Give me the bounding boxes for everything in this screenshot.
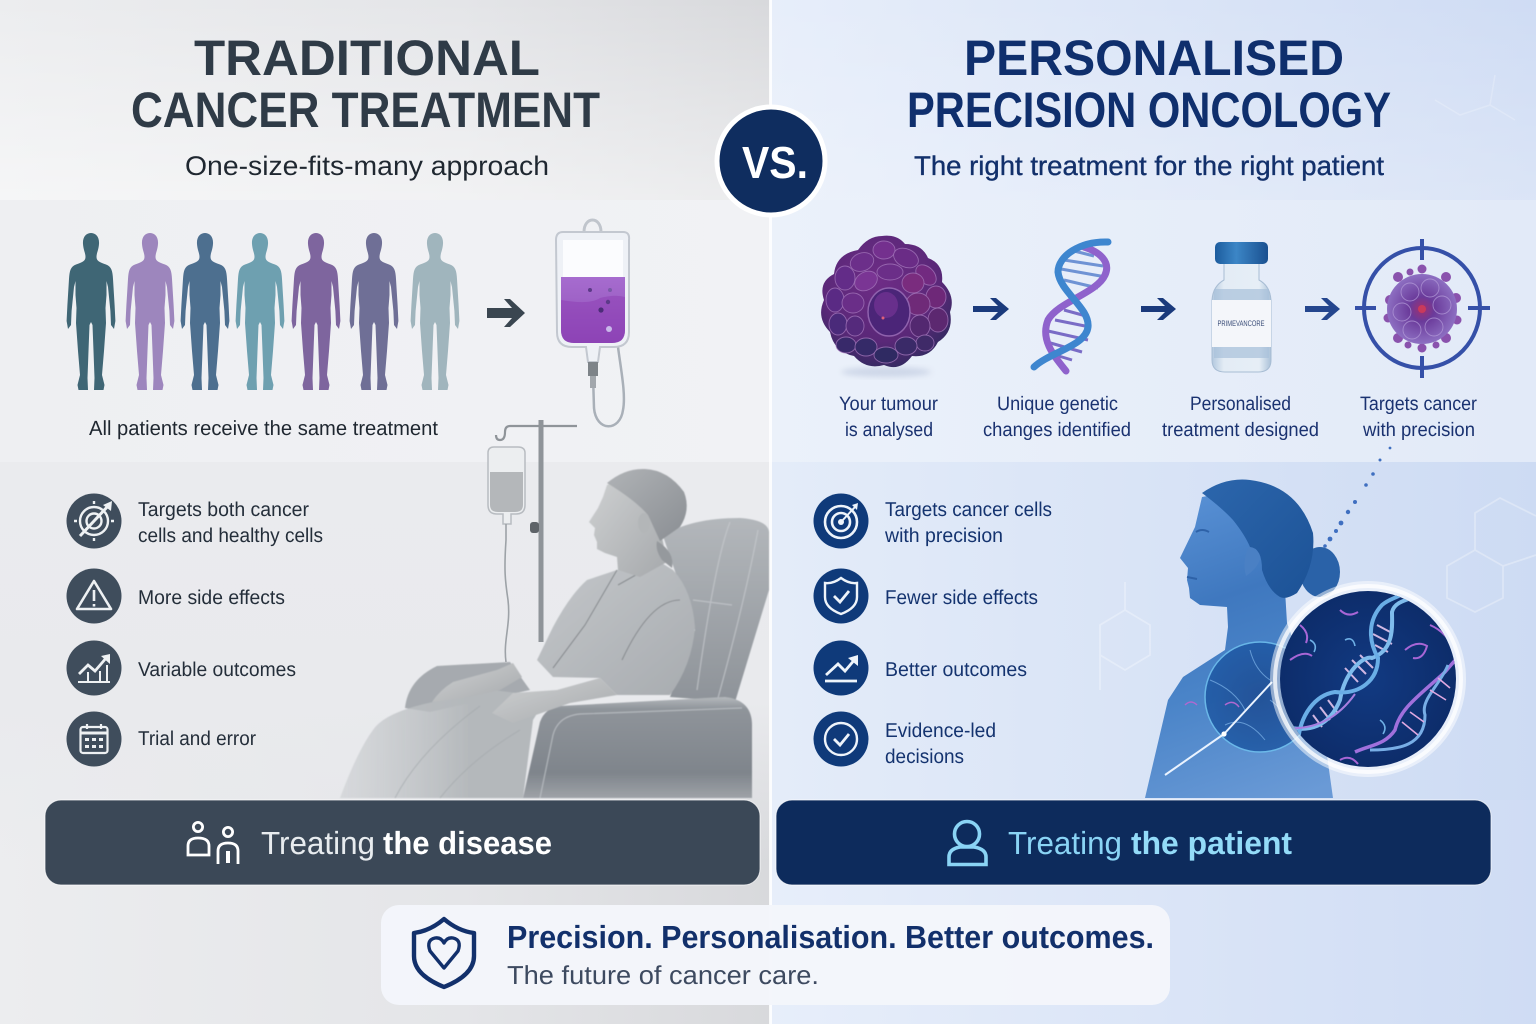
skirt xyxy=(340,690,547,798)
front armrest xyxy=(523,697,752,798)
item: more side effects xyxy=(66,568,285,624)
IV stand with bag xyxy=(488,420,577,662)
divider xyxy=(769,0,772,1024)
title: personalised precision oncology: PRECISION ONCOLOGY xyxy=(907,82,1391,138)
far armrest xyxy=(405,662,530,712)
icon: targeted cancer cell xyxy=(1355,239,1490,378)
item: targets cancer cells: Targets cancer cells xyxy=(885,499,1052,521)
banner: treating the patient: the patient xyxy=(1131,825,1292,861)
dotted targeting line xyxy=(1323,447,1391,548)
title: personalised precision oncology xyxy=(907,30,1391,138)
item: evidence-led decisions: decisions xyxy=(885,746,964,768)
arrow: vial to target xyxy=(1305,298,1340,320)
eye and lips xyxy=(1187,530,1209,579)
hair and bun xyxy=(1300,547,1340,597)
item: targets both cells xyxy=(66,494,323,548)
icon: doctor and patient xyxy=(188,822,238,864)
icon: personalised vial xyxy=(1212,242,1271,372)
laser beam xyxy=(1165,682,1272,775)
item: targets cancer cells xyxy=(814,494,1052,548)
illustration: patient in infusion chair xyxy=(340,420,769,798)
captions: precision pathway: Targets cancer xyxy=(1360,393,1477,415)
captions: precision pathway: is analysed xyxy=(845,419,933,441)
icon: shield with heart xyxy=(414,919,474,987)
item: fewer side effects xyxy=(814,568,1038,624)
banner: treating the disease xyxy=(45,800,760,885)
arrow: DNA to vial xyxy=(1141,298,1176,320)
item: variable outcomes xyxy=(66,640,296,696)
illustration: patient with DNA inset xyxy=(1145,447,1466,798)
banner: treating the disease: the disease xyxy=(383,825,552,861)
near hand xyxy=(492,678,617,723)
badge: VS xyxy=(717,107,825,215)
list: precision benefits xyxy=(814,494,1052,768)
torso xyxy=(537,562,695,695)
title: traditional cancer treatment: CANCER TREATMENT xyxy=(131,82,600,138)
item: better outcomes xyxy=(814,640,1027,696)
item: trial and error xyxy=(66,712,256,766)
item: targets cancer cells: with precision xyxy=(884,525,1003,547)
row of patient silhouettes xyxy=(67,233,459,390)
ear xyxy=(1244,544,1261,576)
caption: same treatment: All patients receive the same treatment xyxy=(89,417,438,440)
small glowing circle on shoulder xyxy=(1185,642,1315,752)
banner: treating the patient xyxy=(776,800,1491,885)
panel: traditional background xyxy=(0,0,770,1024)
headscarf xyxy=(607,469,687,541)
second helix xyxy=(1354,659,1454,754)
scattered fragments xyxy=(1290,610,1452,764)
chair back xyxy=(663,518,769,702)
head and neck xyxy=(589,476,667,577)
arrow: tumour to DNA xyxy=(973,298,1009,320)
item: better outcomes: Better outcomes xyxy=(885,659,1027,681)
icon: tumour cell xyxy=(821,236,952,377)
icon: chemotherapy IV bag xyxy=(556,220,629,426)
item: evidence-led decisions: Evidence-led xyxy=(885,720,996,742)
captions: precision pathway: treatment designed xyxy=(1162,419,1319,441)
main helix rungs xyxy=(1313,625,1392,727)
far hand xyxy=(432,663,522,702)
item: evidence-led decisions xyxy=(814,712,996,768)
item: targets both cells: Targets both cancer xyxy=(138,499,309,521)
icon: personalised vial: PRIMEVANCORE xyxy=(1218,319,1264,328)
captions: precision pathway: Your tumour xyxy=(839,393,938,415)
captions: precision pathway xyxy=(839,393,1477,441)
banner: treating the disease: Treating xyxy=(261,825,375,861)
banner: treating the patient: Treating xyxy=(1008,825,1122,861)
footer card: The future of cancer care. xyxy=(507,960,819,990)
item: fewer side effects: Fewer side effects xyxy=(885,587,1038,609)
item: more side effects: More side effects xyxy=(138,587,285,609)
captions: precision pathway: Personalised xyxy=(1190,393,1291,415)
captions: precision pathway: with precision xyxy=(1362,419,1475,441)
subtitle: precision: The right treatment for the right patient xyxy=(914,151,1384,181)
arrow: patients to IV bag xyxy=(487,299,525,327)
woman silhouette xyxy=(1145,490,1333,798)
panel: precision background xyxy=(770,0,1536,1024)
main helix strands xyxy=(1294,598,1408,731)
icon: DNA helix xyxy=(1034,242,1108,371)
title: traditional cancer treatment xyxy=(131,30,600,138)
item: variable outcomes: Variable outcomes xyxy=(138,659,296,681)
badge: VS: VS. xyxy=(742,137,808,188)
captions: precision pathway: Unique genetic xyxy=(997,393,1118,415)
title: personalised precision oncology: PERSONALISED xyxy=(964,30,1344,86)
list: traditional drawbacks xyxy=(66,494,323,766)
subtitle: traditional: One-size-fits-many approach xyxy=(185,151,549,181)
title: traditional cancer treatment: TRADITIONAL xyxy=(194,30,540,86)
item: targets both cells: cells and healthy cells xyxy=(138,525,323,547)
item: trial and error: Trial and error xyxy=(138,728,256,750)
footer card: Precision. Personalisation. Better outcomes. xyxy=(507,919,1154,955)
captions: precision pathway: changes identified xyxy=(983,419,1131,441)
icon: patient xyxy=(949,822,986,864)
DNA inset xyxy=(1270,581,1466,777)
footer card xyxy=(381,905,1170,1005)
